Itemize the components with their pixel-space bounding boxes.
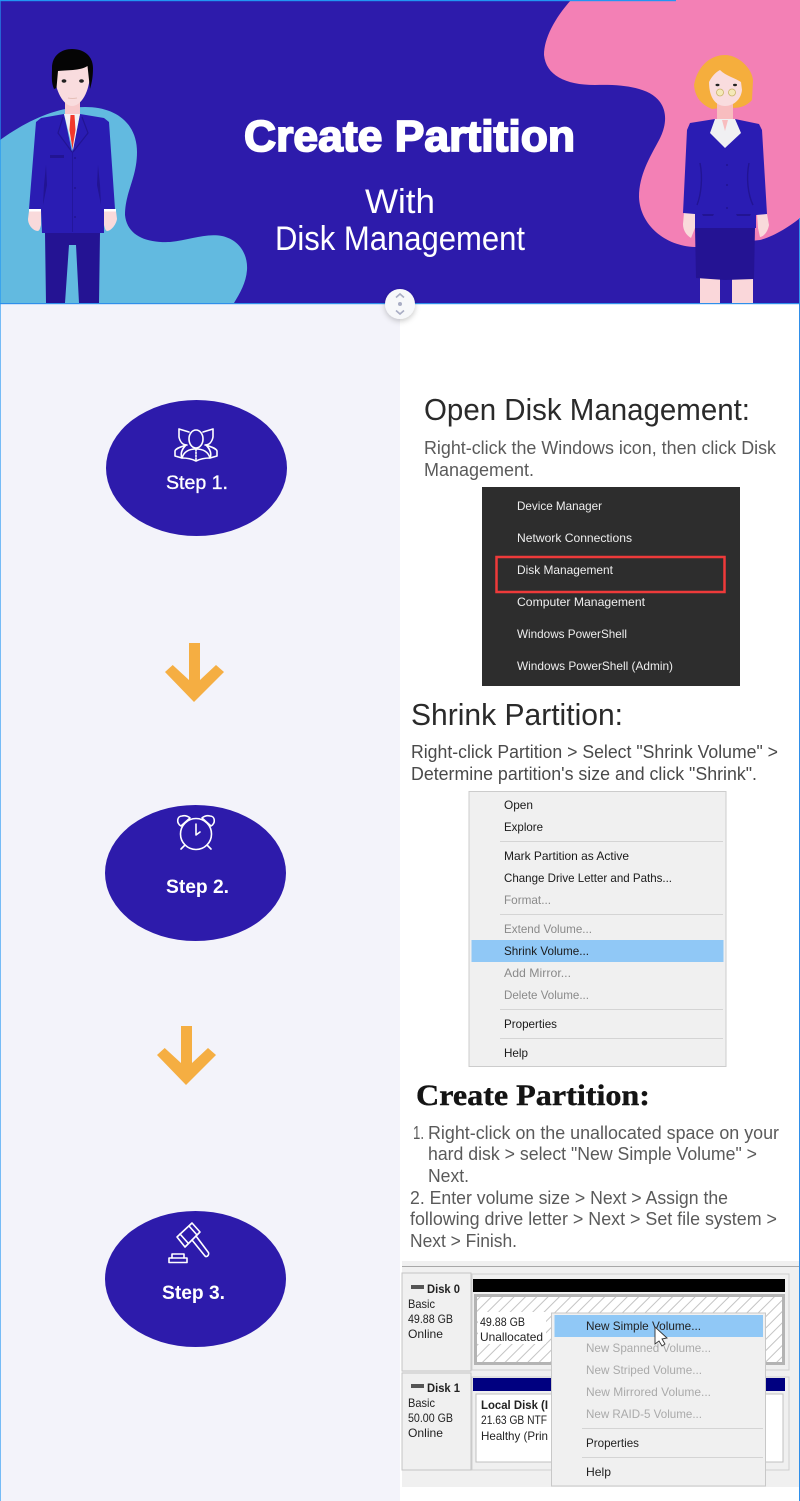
context menu [552,1313,766,1486]
disk 0 bar [472,1274,789,1370]
heading: Create Partition: [416,1079,650,1112]
context menu: New Spanned Volume... [586,1341,711,1355]
icon: woman in suit [683,55,769,303]
disk 1 bar: Local Disk (I [481,1398,548,1412]
screenshot: shrink context menu: Open [504,798,533,812]
screenshot: shrink context menu: Add Mirror... [504,966,571,980]
context menu: New Simple Volume... [586,1319,701,1333]
panel: shrink partition [411,697,778,1066]
screenshot: shrink context menu [469,792,726,1066]
text block: Management. [424,460,534,480]
text block: instructions: 1. [413,1123,424,1143]
panel: create partition [402,1079,800,1487]
screenshot: power user menu: Device Manager [517,499,602,513]
screenshot: shrink context menu: Extend Volume... [504,922,592,936]
disk 1 bar: 21.63 GB NTF [481,1413,547,1427]
text block: instructions: following drive letter > Next > Set file system > [410,1209,777,1229]
screenshot: power user menu: Network Connections [517,531,632,545]
step 2 [105,805,286,941]
icon: people group [175,429,217,461]
disk 1 label: Online [408,1426,443,1440]
disk 0 label: 49.88 GB [408,1312,453,1326]
arrow: step 2 to step 3 [157,1026,216,1085]
step 1: Step 1. [166,473,228,494]
icon: section handle [385,289,415,319]
screenshot: shrink context menu: Change Drive Letter and Paths... [504,871,672,885]
context menu: New Mirrored Volume... [586,1385,711,1399]
context menu: Help [586,1465,611,1479]
disk 1 label [402,1373,471,1470]
disk 0 label: Disk 0 [427,1282,460,1296]
text block: Determine partition's size and click "Shrink". [411,764,757,784]
panel: open disk management [424,392,777,686]
screenshot: power user menu: Disk Management [517,563,614,577]
disk 1 bar [472,1377,789,1470]
screenshot: shrink context menu: Shrink Volume... [504,944,589,958]
text block [411,742,778,784]
text block: instructions: Next. [428,1166,469,1186]
screenshot: power user menu: Windows PowerShell (Admin) [517,659,673,673]
screenshot: shrink context menu: Format... [504,893,551,907]
text block: instructions: Right-click on the unallocated space on your [428,1123,779,1143]
context menu: Properties [586,1436,639,1450]
icon: gavel [169,1223,209,1262]
disk 0 bar: 49.88 GB [480,1315,525,1329]
title: Create Partition [244,112,575,161]
text block: instructions [410,1123,779,1251]
heading: Open Disk Management: [424,392,750,427]
text block: Right-click Partition > Select "Shrink Volume" > [411,742,778,762]
subtitle: With [365,183,435,221]
disk 1 bar: Healthy (Prin [481,1429,548,1443]
icon: mouse cursor [655,1327,667,1346]
disk 0 label: Online [408,1327,443,1341]
icon: man in suit [28,49,117,303]
screenshot: disk management context menu [402,1261,800,1487]
arrow: step 1 to step 2 [165,643,224,702]
screenshot: power user menu: Computer Management [517,595,646,609]
disk 0 label [402,1273,471,1371]
disk 1 label: Basic [408,1396,435,1410]
subtitle: Disk Management [275,220,525,258]
screenshot: shrink context menu: Mark Partition as Active [504,849,629,863]
screenshot: shrink context menu: Delete Volume... [504,988,589,1002]
panel: left column background [0,304,400,1501]
context menu: New Striped Volume... [586,1363,702,1377]
text block: instructions: 2. Enter volume size > Next > Assign the [410,1188,728,1208]
screenshot: shrink context menu: Explore [504,820,543,834]
disk 1 label: Disk 1 [427,1381,460,1395]
step 1 [106,400,287,536]
context menu: New RAID-5 Volume... [586,1407,702,1421]
subtitle [275,183,525,258]
disk 0 bar: Unallocated [480,1330,543,1344]
text block [424,438,777,480]
screenshot: shrink context menu: Help [504,1046,528,1060]
step 3 [105,1211,286,1347]
screenshot: power user menu: Windows PowerShell [517,627,627,641]
disk 1 label: 50.00 GB [408,1411,453,1425]
text block: instructions: Next > Finish. [410,1231,517,1251]
disk 0 label: Basic [408,1297,435,1311]
step 2: Step 2. [166,877,229,898]
text block: instructions: hard disk > select "New Simple Volume" > [428,1144,757,1164]
screenshot: power user menu [482,487,740,686]
icon: alarm clock [178,816,214,850]
text block: Right-click the Windows icon, then click Disk [424,438,777,458]
heading: Shrink Partition: [411,697,623,732]
step 3: Step 3. [162,1283,225,1304]
screenshot: shrink context menu: Properties [504,1017,557,1031]
panel: header banner [0,0,800,304]
